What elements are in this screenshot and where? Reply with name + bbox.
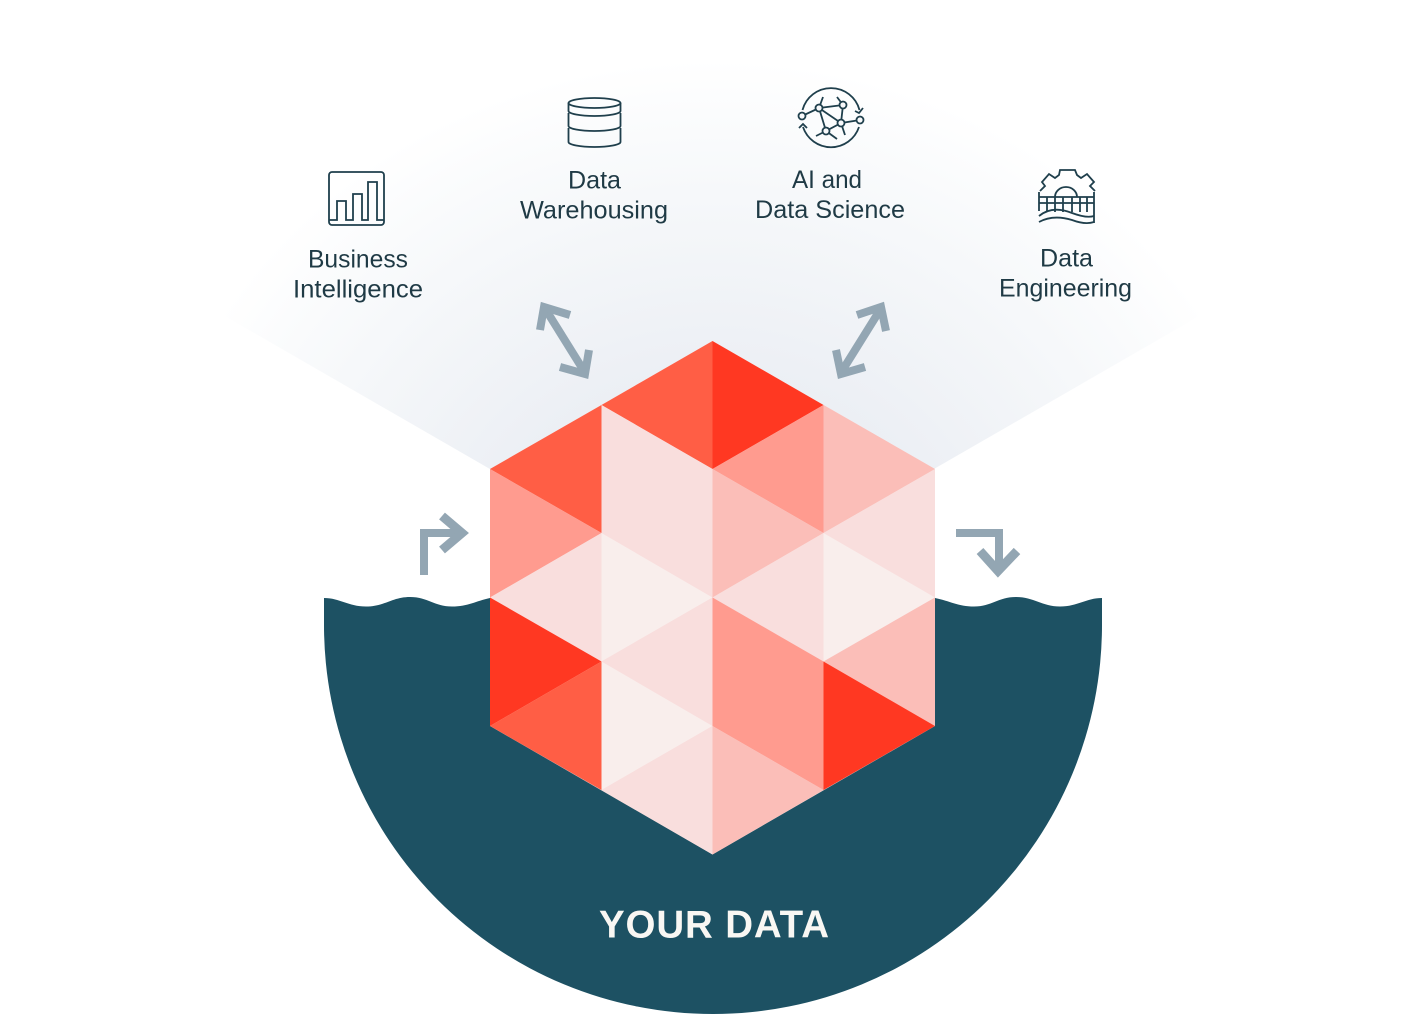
label: AI and Data Science: AI and bbox=[792, 166, 862, 194]
icon: gear over bridge bbox=[1039, 170, 1095, 223]
label: Data Engineering: Data bbox=[1040, 244, 1093, 272]
icon: database bbox=[568, 98, 620, 147]
label: Business Intelligence bbox=[293, 246, 423, 304]
hexagon of triangles bbox=[490, 341, 935, 854]
icon: bar chart bbox=[329, 172, 384, 225]
arrow: double, upper right bbox=[836, 307, 886, 374]
label: Data Warehousing: Data bbox=[568, 166, 621, 194]
label: AI and Data Science: Data Science bbox=[755, 196, 905, 224]
arrow: into hexagon from the left bbox=[424, 516, 463, 575]
background light wedge bbox=[190, 0, 1234, 597]
water basin bbox=[324, 597, 1102, 1014]
label: Business Intelligence: Business bbox=[308, 246, 408, 274]
title: YOUR DATA: YOUR DATA bbox=[599, 904, 829, 946]
label: Business Intelligence: Intelligence bbox=[293, 276, 423, 304]
label: Data Warehousing: Warehousing bbox=[520, 196, 668, 224]
arrow: double, upper left bbox=[540, 307, 589, 374]
label: Data Engineering: Engineering bbox=[999, 274, 1132, 302]
label: Data Warehousing bbox=[520, 166, 668, 224]
label: Data Engineering bbox=[999, 244, 1132, 302]
label: AI and Data Science bbox=[755, 166, 905, 224]
arrow: out of hexagon to the right bbox=[956, 533, 1017, 571]
icon: network in a cycle bbox=[798, 88, 864, 147]
